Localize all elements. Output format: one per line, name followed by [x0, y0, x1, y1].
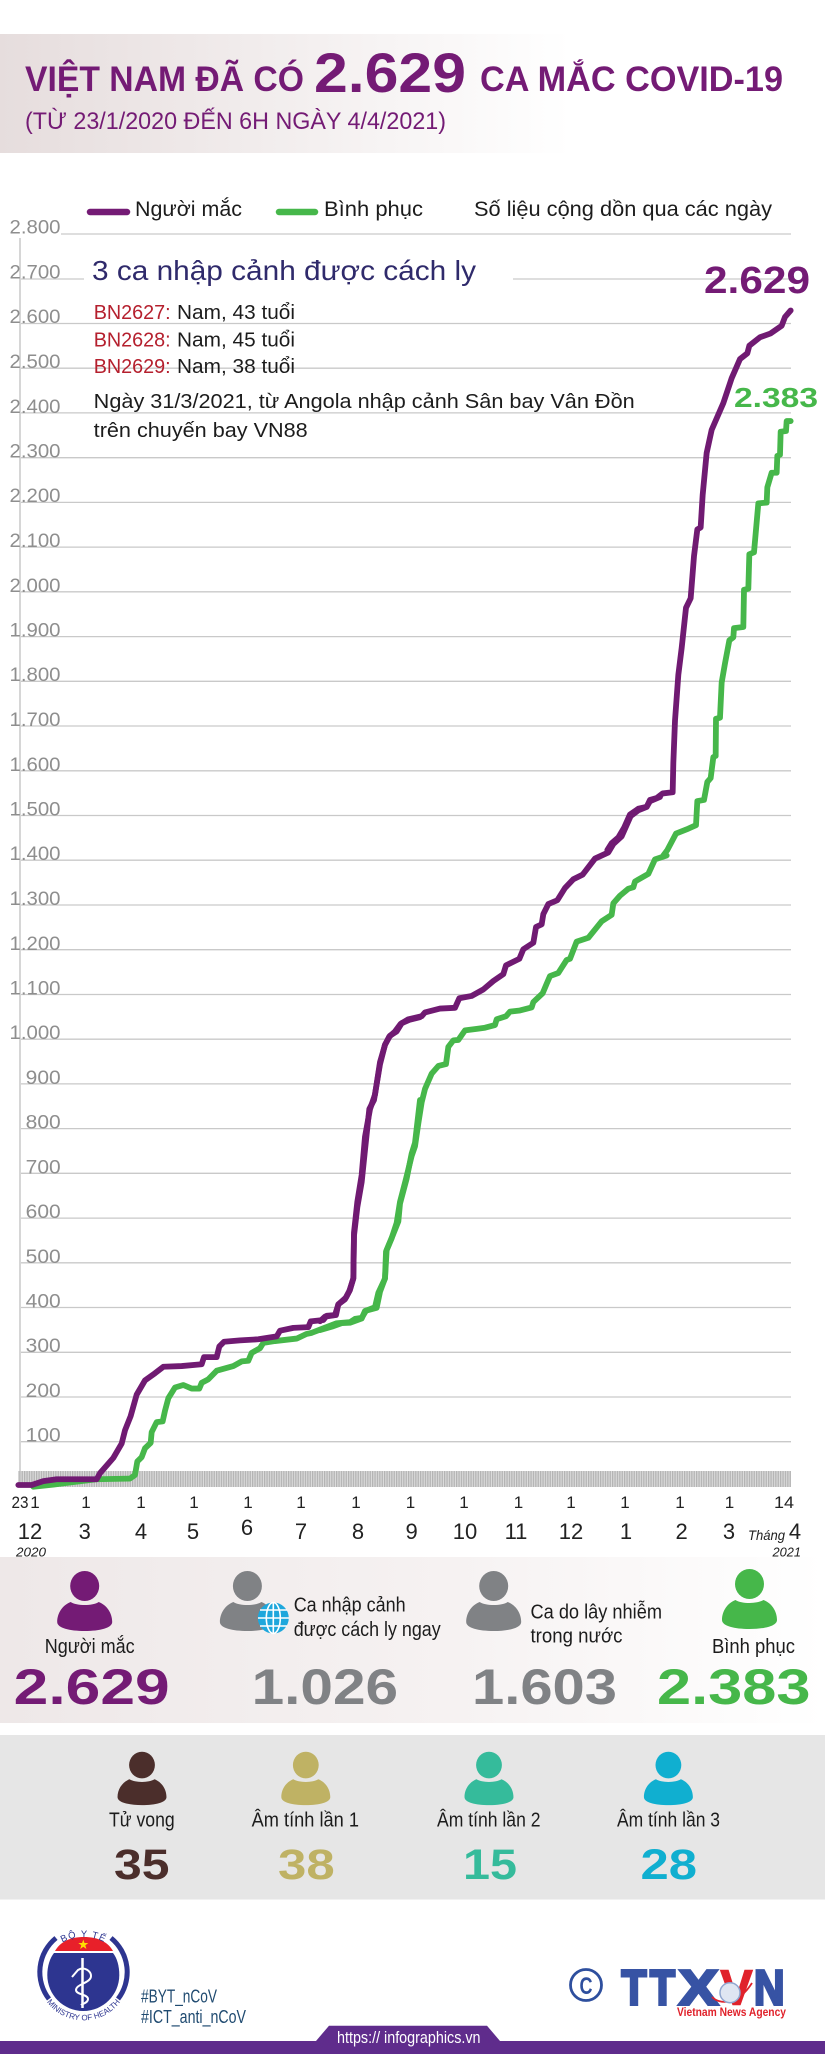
stat: domestic: 1.603	[472, 1659, 617, 1715]
icon: person khaki	[281, 1752, 330, 1805]
axis caption: 2021: 2021	[772, 1544, 801, 1560]
panel: outcomes	[0, 1735, 825, 1900]
y-axis labels: 1.500	[10, 800, 61, 820]
stat: domestic: trong nước	[530, 1626, 622, 1648]
header banner	[0, 34, 783, 153]
stat: imported: được cách ly ngay	[294, 1619, 441, 1641]
axis caption: 2020: 2020	[15, 1544, 47, 1560]
stat: imported: Ca nhập cảnh	[294, 1595, 406, 1617]
x-axis month labels: 10	[453, 1519, 477, 1544]
x-axis month labels: 12	[559, 1519, 583, 1544]
x-axis day labels: 1	[296, 1493, 306, 1512]
stat: deaths: 35	[114, 1841, 170, 1889]
x-axis month labels: 4	[135, 1519, 147, 1544]
TTXVN logo: V	[720, 1962, 753, 2016]
title: 2.629	[314, 41, 466, 104]
x-axis day labels: 1	[189, 1493, 199, 1512]
x-axis day labels: 1	[30, 1493, 40, 1512]
annotation heading: 3 ca nhập cảnh được cách ly	[92, 255, 476, 286]
footer bar	[0, 2026, 825, 2054]
y-axis labels	[10, 218, 61, 1447]
TTXVN logo: Vietnam News Agency	[677, 2005, 786, 2019]
subtitle: (TỪ 23/1/2020 ĐẾN 6H NGÀY 4/4/2021)	[25, 107, 446, 135]
x-axis day labels	[12, 1493, 794, 1512]
x-axis month labels	[18, 1515, 801, 1544]
stat: imported	[220, 1571, 441, 1715]
y-axis labels: 1.100	[10, 978, 61, 1000]
icon: copyright symbol	[570, 1970, 602, 2000]
stat: negative three times: 28	[640, 1841, 697, 1889]
x-axis month labels: 7	[295, 1519, 307, 1544]
annotation description: trên chuyến bay VN88	[94, 420, 308, 442]
patient list: BN2627:	[94, 302, 171, 324]
green recovered curve	[33, 421, 791, 1487]
x-axis day labels: 1	[675, 1493, 685, 1512]
patient list: Nam, 38 tuổi	[177, 356, 295, 378]
stat: deaths: Tử vong	[109, 1810, 175, 1832]
stat: confirmed	[14, 1571, 170, 1715]
stat: domestic: Ca do lây nhiễm	[530, 1601, 662, 1624]
y-axis labels: 1.000	[10, 1023, 61, 1044]
y-axis labels: 1.700	[10, 710, 61, 731]
y-axis labels: 900	[26, 1068, 61, 1089]
legend: Bình phục	[324, 198, 423, 221]
icon: Ministry of Health logo: MINISTRY OF HEALTH	[47, 1999, 120, 2020]
y-axis labels: 2.000	[10, 576, 61, 597]
line chart	[10, 218, 818, 1560]
axis caption: month: Tháng	[748, 1527, 785, 1543]
icon: copyright symbol: C	[580, 1973, 592, 2000]
y-axis labels: 700	[26, 1158, 61, 1178]
x-axis day labels: 1	[620, 1493, 630, 1512]
x-axis month labels: 1	[620, 1519, 632, 1544]
x-axis month labels: 2	[675, 1519, 688, 1544]
x-axis day labels: 14	[774, 1493, 794, 1512]
end value: confirmed: 2.629	[704, 260, 810, 302]
icon: person grey	[466, 1571, 521, 1631]
y-axis labels: 400	[26, 1292, 61, 1312]
stat: negative twice: 15	[463, 1841, 517, 1889]
x-axis day labels: 1	[459, 1493, 469, 1512]
icon: Ministry of Health logo	[37, 1930, 130, 2020]
icon: person brown	[118, 1752, 166, 1805]
stat: confirmed: 2.629	[14, 1659, 170, 1715]
legend: Người mắc	[135, 198, 242, 221]
patient list: Nam, 45 tuổi	[177, 330, 295, 352]
patient list	[94, 302, 295, 378]
y-axis labels: 100	[26, 1426, 61, 1447]
x-axis month labels: 3	[723, 1519, 735, 1544]
x-axis day labels: 1	[566, 1493, 576, 1512]
x-axis day labels: 1	[243, 1493, 253, 1512]
x-axis day labels: 1	[136, 1493, 146, 1512]
patient list: BN2629:	[94, 356, 171, 378]
y-axis labels: 300	[26, 1336, 61, 1357]
icon: Ministry of Health logo: BỘ Y TẾ	[60, 1930, 107, 1942]
icon: person green	[722, 1569, 777, 1629]
x-axis day labels: 23	[12, 1493, 28, 1512]
x-axis day labels: 1	[351, 1493, 361, 1512]
title: VIỆT NAM ĐÃ CÓ	[25, 59, 304, 99]
stat: negative three times	[617, 1752, 720, 1889]
y-axis labels: 1.900	[10, 620, 61, 642]
x-axis day labels: 1	[725, 1493, 734, 1512]
y-axis labels: 500	[26, 1247, 61, 1268]
y-axis labels: 1.400	[10, 844, 61, 865]
icon: globe	[258, 1602, 289, 1634]
stat: domestic	[466, 1571, 662, 1715]
stat: negative three times: Âm tính lần 3	[617, 1809, 720, 1832]
y-axis labels: 1.300	[10, 889, 61, 910]
stat: negative twice: Âm tính lần 2	[437, 1809, 540, 1832]
legend	[90, 198, 773, 221]
stat: recovered: Bình phục	[712, 1636, 795, 1658]
stat: negative once: 38	[278, 1841, 335, 1889]
stat: negative once	[252, 1752, 359, 1889]
x-axis day labels: 1	[81, 1493, 91, 1512]
x-axis month labels: 4	[789, 1519, 801, 1544]
x-axis month labels: 5	[187, 1519, 199, 1544]
x-axis day labels: 1	[514, 1493, 523, 1512]
annotation description	[94, 391, 635, 442]
icon: person purple	[57, 1571, 112, 1631]
hashtags: #ICT_anti_nCoV	[141, 2007, 246, 2028]
icon: person grey	[220, 1571, 275, 1631]
icon: person blue	[644, 1752, 693, 1805]
website url: https:// infographics.vn	[337, 2028, 480, 2047]
y-axis labels: 2.300	[10, 442, 61, 462]
x-axis month labels: 8	[352, 1519, 364, 1544]
stat: imported: 1.026	[252, 1659, 398, 1715]
stat: recovered	[657, 1569, 810, 1715]
TTXVN logo: X	[679, 1962, 718, 2016]
y-axis labels: 2.100	[10, 531, 61, 552]
title	[25, 41, 783, 104]
TTXVN logo: T	[650, 1962, 675, 2016]
stat: negative twice	[437, 1752, 540, 1889]
x-axis month labels: 3	[79, 1519, 91, 1544]
y-axis labels: 200	[26, 1381, 61, 1402]
y-axis labels: 1.600	[10, 755, 61, 776]
title: CA MẮC COVID-19	[480, 59, 783, 99]
patient list: Nam, 43 tuổi	[177, 302, 295, 324]
x-axis month labels: 12	[18, 1519, 42, 1544]
y-axis labels: 800	[26, 1112, 61, 1134]
y-axis labels: 2.500	[10, 352, 61, 373]
TTXVN logo	[622, 1962, 786, 2019]
TTXVN logo: T	[622, 1962, 647, 2016]
stat: deaths	[109, 1752, 175, 1889]
hashtags: #BYT_nCoV	[141, 1987, 217, 2008]
TTXVN logo: N	[754, 1962, 784, 2016]
y-axis labels: 1.200	[10, 934, 61, 955]
panel: totals	[0, 1557, 825, 1723]
x-axis month labels: 6	[241, 1515, 253, 1540]
icon: person teal	[465, 1752, 513, 1805]
stat: confirmed: Người mắc	[45, 1635, 135, 1658]
stat: negative once: Âm tính lần 1	[252, 1809, 359, 1832]
x-axis month labels: 9	[405, 1519, 418, 1544]
y-axis labels: 2.600	[10, 307, 61, 328]
y-axis labels: 1.800	[10, 665, 61, 686]
purple confirmed cases curve	[18, 310, 791, 1485]
patient list: BN2628:	[94, 330, 171, 352]
y-axis labels: 2.700	[10, 262, 61, 284]
end value: recovered: 2.383	[734, 382, 818, 413]
x-axis day labels: 1	[406, 1493, 415, 1512]
y-axis labels: 2.200	[10, 486, 61, 507]
y-axis labels: 2.400	[10, 397, 61, 418]
annotation: imported cases	[92, 255, 635, 442]
annotation description: Ngày 31/3/2021, từ Angola nhập cảnh Sân bay Vân Đồn	[94, 391, 635, 413]
hashtags	[141, 1987, 246, 2028]
x-axis month labels: 11	[505, 1519, 527, 1544]
legend: Số liệu cộng dồn qua các ngày	[474, 198, 773, 221]
stat: recovered: 2.383	[657, 1659, 810, 1715]
y-axis labels: 2.800	[10, 218, 61, 238]
y-axis labels: 600	[26, 1202, 61, 1223]
